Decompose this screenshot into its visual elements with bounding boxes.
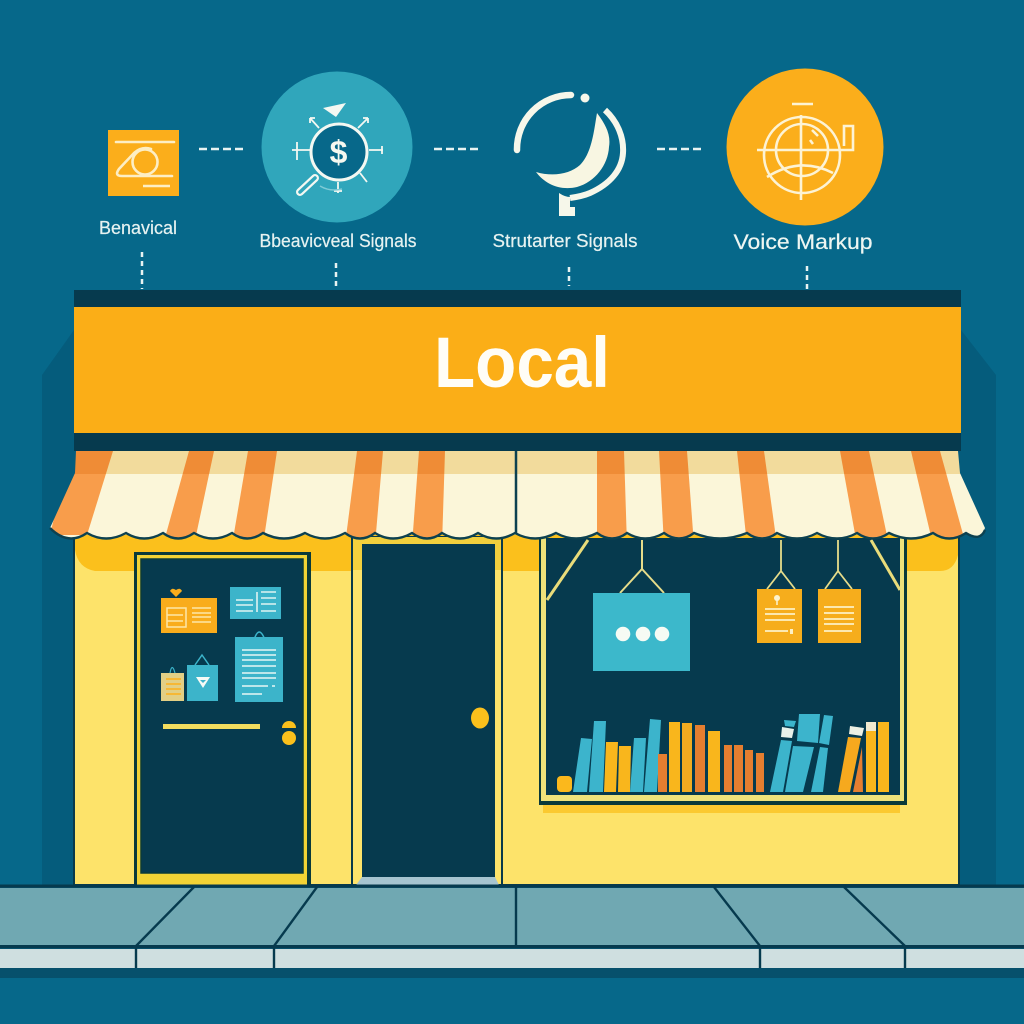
poster: blue card [230,587,281,619]
door knobs [282,721,296,745]
sign title: Local [434,324,610,403]
icon: crescent magnifier [517,94,623,216]
poster: blue bag [187,655,218,701]
door handle bar [163,724,260,729]
hanging sign: notice [757,540,802,643]
sign board [74,290,961,451]
label: Bbeavicveal Signals: Bbeavicveal Signals [260,231,416,251]
door knob [471,708,489,728]
connector dashes 1 [199,148,243,150]
icon: dollar circle: $ [330,134,348,170]
label: Strutarter Signals: Strutarter Signals [492,231,638,251]
connector 4 to sign [806,266,808,289]
connector 2 to sign [335,263,337,289]
label: Voice Markup: Voice Markup [734,231,872,254]
sidewalk [0,885,1024,978]
connector dashes 2 [434,148,478,150]
striped awning [49,451,986,540]
left door with posters [134,552,311,885]
hanging sign: chat [593,540,690,671]
books on shelf [557,714,889,792]
poster: orange card [161,589,217,633]
icon: behavioral card [108,130,179,196]
shop window [539,538,907,813]
connector 3 to sign [568,267,570,286]
awning scalloped edge [50,528,985,538]
shop wall [74,530,959,885]
hanging sign: list [818,540,861,643]
centre door [352,537,502,885]
window bracket lines [547,540,900,600]
connector dashes 3 [657,148,702,150]
connector 1 to sign [141,252,143,289]
icon: globe target [726,68,884,226]
label: Benavical: Benavical [99,218,177,238]
icon: dollar circle [262,72,412,222]
poster: large blue sheet [235,632,283,702]
building side shadow [42,330,996,885]
poster: small tag [161,668,184,701]
